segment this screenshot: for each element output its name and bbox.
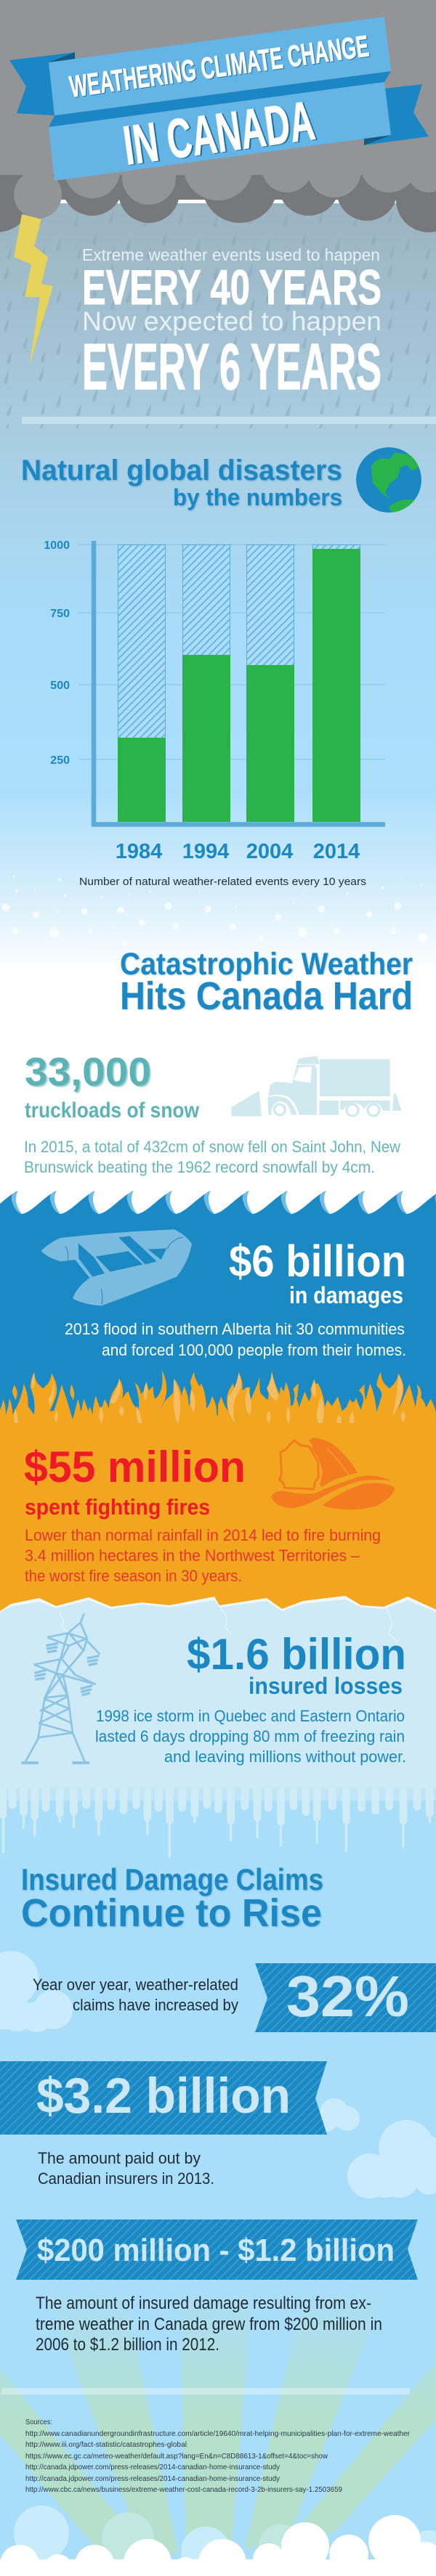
heading [21,1862,323,1935]
bar 2004 [246,545,294,822]
icicles [0,1788,436,1856]
front clouds [0,2515,436,2576]
panel: natural global disasters [21,447,423,888]
insured damage description: treme weather in Canada grew from $200 million in [36,2315,382,2334]
sources: http://canada.jdpower.com/press-releases/2014-canadian-home-insurance-study [25,2463,280,2471]
y axis labels: 750 [50,608,70,620]
panel: insured damage claims [0,1862,436,2553]
snow description [24,1138,400,1176]
ribbon: 32 percent: 32% [286,1964,409,2029]
panel: flood [0,1191,436,1424]
fire statistic: $55 million [24,1443,246,1491]
heading [21,455,342,510]
fire description: Lower than normal rainfall in 2014 led to fire burning [25,1526,381,1544]
sources: http://www.canadianundergroundinfrastructure.com/article/19640/mrat-helping-municipalities-plan-for-extreme-weather [25,2429,410,2438]
title ribbon [9,17,429,181]
fire subheading: spent fighting fires [25,1494,210,1520]
ice description [95,1707,406,1766]
fire background [0,1423,436,1619]
sources: http://www.iii.org/fact-statistic/catastrophes-global [25,2440,187,2449]
ribbon: 3.2 billion [0,2061,327,2135]
flood description: and forced 100,000 people from their homes. [102,1341,406,1359]
fire description [25,1526,381,1585]
insured damage description: The amount of insured damage resulting from ex- [36,2294,371,2313]
ice description: 1998 ice storm in Quebec and Eastern Ontario [96,1707,405,1725]
heading: Continue to Rise [21,1891,322,1935]
x axis labels: 2004 [246,840,293,863]
flood background [0,1214,436,1424]
bottom clouds [0,2506,436,2576]
flames [0,1370,436,1430]
claims text: Year over year, weather-related [33,1976,238,1994]
insured damage description [36,2294,382,2355]
claims text: claims have increased by [73,1996,238,2014]
panel: snow [24,1049,402,1176]
chart caption: Number of natural weather-related events every 10 years [79,876,366,888]
cloud small right [318,2098,360,2132]
fire description: 3.4 million hectares in the Northwest Territories – [25,1546,360,1565]
title line two: IN CANADA [120,90,318,177]
icon: firefighter helmet [271,1438,395,1509]
bar 1994 [182,545,230,822]
flood waves [0,1191,436,1215]
icon: lightning bolt [14,214,53,367]
bar chart [44,539,385,863]
ribbon: 32 percent [255,1963,436,2032]
bar 2014 [312,545,360,822]
sources: http://canada.jdpower.com/press-releases/2014-canadian-home-insurance-study [25,2474,280,2483]
flood subheading: in damages [289,1282,403,1308]
fire description: the worst fire season in 30 years. [25,1567,242,1585]
y axis labels [44,539,70,767]
icon: transmission tower [21,1614,100,1763]
axes [94,541,385,825]
ice statistic: $1.6 billion [187,1630,406,1679]
y axis labels: 500 [50,680,70,692]
statement line one: Extreme weather events used to happen [82,245,380,264]
ice background [0,1599,436,1790]
ribbon upper band [49,17,391,115]
icon: snow plow truck [231,1056,402,1116]
snow statistic: 33,000 [25,1049,151,1094]
ice text [95,1630,406,1766]
sources [25,2418,410,2494]
extreme weather statement [82,245,382,404]
heading: catastrophic weather [120,947,413,1018]
ice subheading: insured losses [249,1673,403,1699]
flood description [65,1320,406,1359]
y axis labels: 250 [50,754,70,767]
icon: globe [356,447,423,516]
cloud big right [347,2120,436,2198]
ice description: and leaving millions without power. [164,1748,406,1766]
bar 1984 [118,545,166,822]
snow subheading: truckloads of snow [25,1099,200,1122]
panel: ice storm [0,1596,436,1856]
statement line two: Now expected to happen [82,306,382,336]
claims text [33,1976,238,2014]
cloud left [0,1951,73,2032]
x axis labels [116,840,360,863]
sources: Sources: [25,2418,52,2426]
icon: inflatable boat [41,1229,192,1305]
clouds [0,1951,436,2198]
background: lower sky [0,1786,436,2576]
x axis labels: 1994 [182,840,229,863]
dark storm cloud [0,147,436,232]
panel: fire [0,1370,436,1619]
flood statistic: $6 billion [229,1236,406,1286]
panel: storm header [0,0,436,404]
storm gradient background [0,203,436,973]
sources: http://www.cbc.ca/news/business/extreme-weather-cost-canada-record-3-2b-insurers-say-1.2503659 [25,2485,342,2494]
heading: by the numbers [173,484,342,510]
ribbon lower band [49,82,391,181]
gridlines [78,545,385,759]
rays of sunshine [0,2285,436,2553]
heading: Natural global disasters [21,455,342,486]
paid out text [38,2149,214,2188]
snow description: In 2015, a total of 432cm of snow fell on Saint John, New [24,1138,400,1156]
ribbon: 3.2 billion: $3.2 billion [36,2068,291,2124]
ribbon: 200 million to 1.2 billion [16,2220,418,2280]
ribbon tails and folds [9,52,429,145]
snow dots [1,876,427,946]
x axis labels: 1984 [116,840,162,863]
paid out text: The amount paid out by [38,2149,201,2167]
paid out text: Canadian insurers in 2013. [38,2169,214,2188]
sources: https://www.ec.gc.ca/meteo-weather/default.asp?lang=En&n=C8D88613-1&offset=4&toc=show [25,2452,328,2461]
insured damage description: 2006 to $1.2 billion in 2012. [36,2335,219,2355]
ribbon: 200 million to 1.2 billion: $200 million - $1.2 billion [37,2233,395,2268]
heading: Insured Damage Claims [21,1862,323,1896]
ice cracks [60,1606,398,1642]
y axis labels: 1000 [44,539,70,552]
flood text [65,1236,406,1359]
ice description: lasted 6 days dropping 80 mm of freezing rain [95,1727,405,1745]
rain pattern [0,211,436,428]
light storm cloud [0,0,436,219]
ice highlight ridge [0,1596,436,1626]
back clouds [14,2506,436,2576]
heading: catastrophic weather: Catastrophic Weather [120,947,413,982]
x axis labels: 2014 [313,840,360,863]
snow description: Brunswick beating the 1962 record snowfall by 4cm. [24,1158,375,1176]
flood description: 2013 flood in southern Alberta hit 30 communities [65,1320,405,1338]
